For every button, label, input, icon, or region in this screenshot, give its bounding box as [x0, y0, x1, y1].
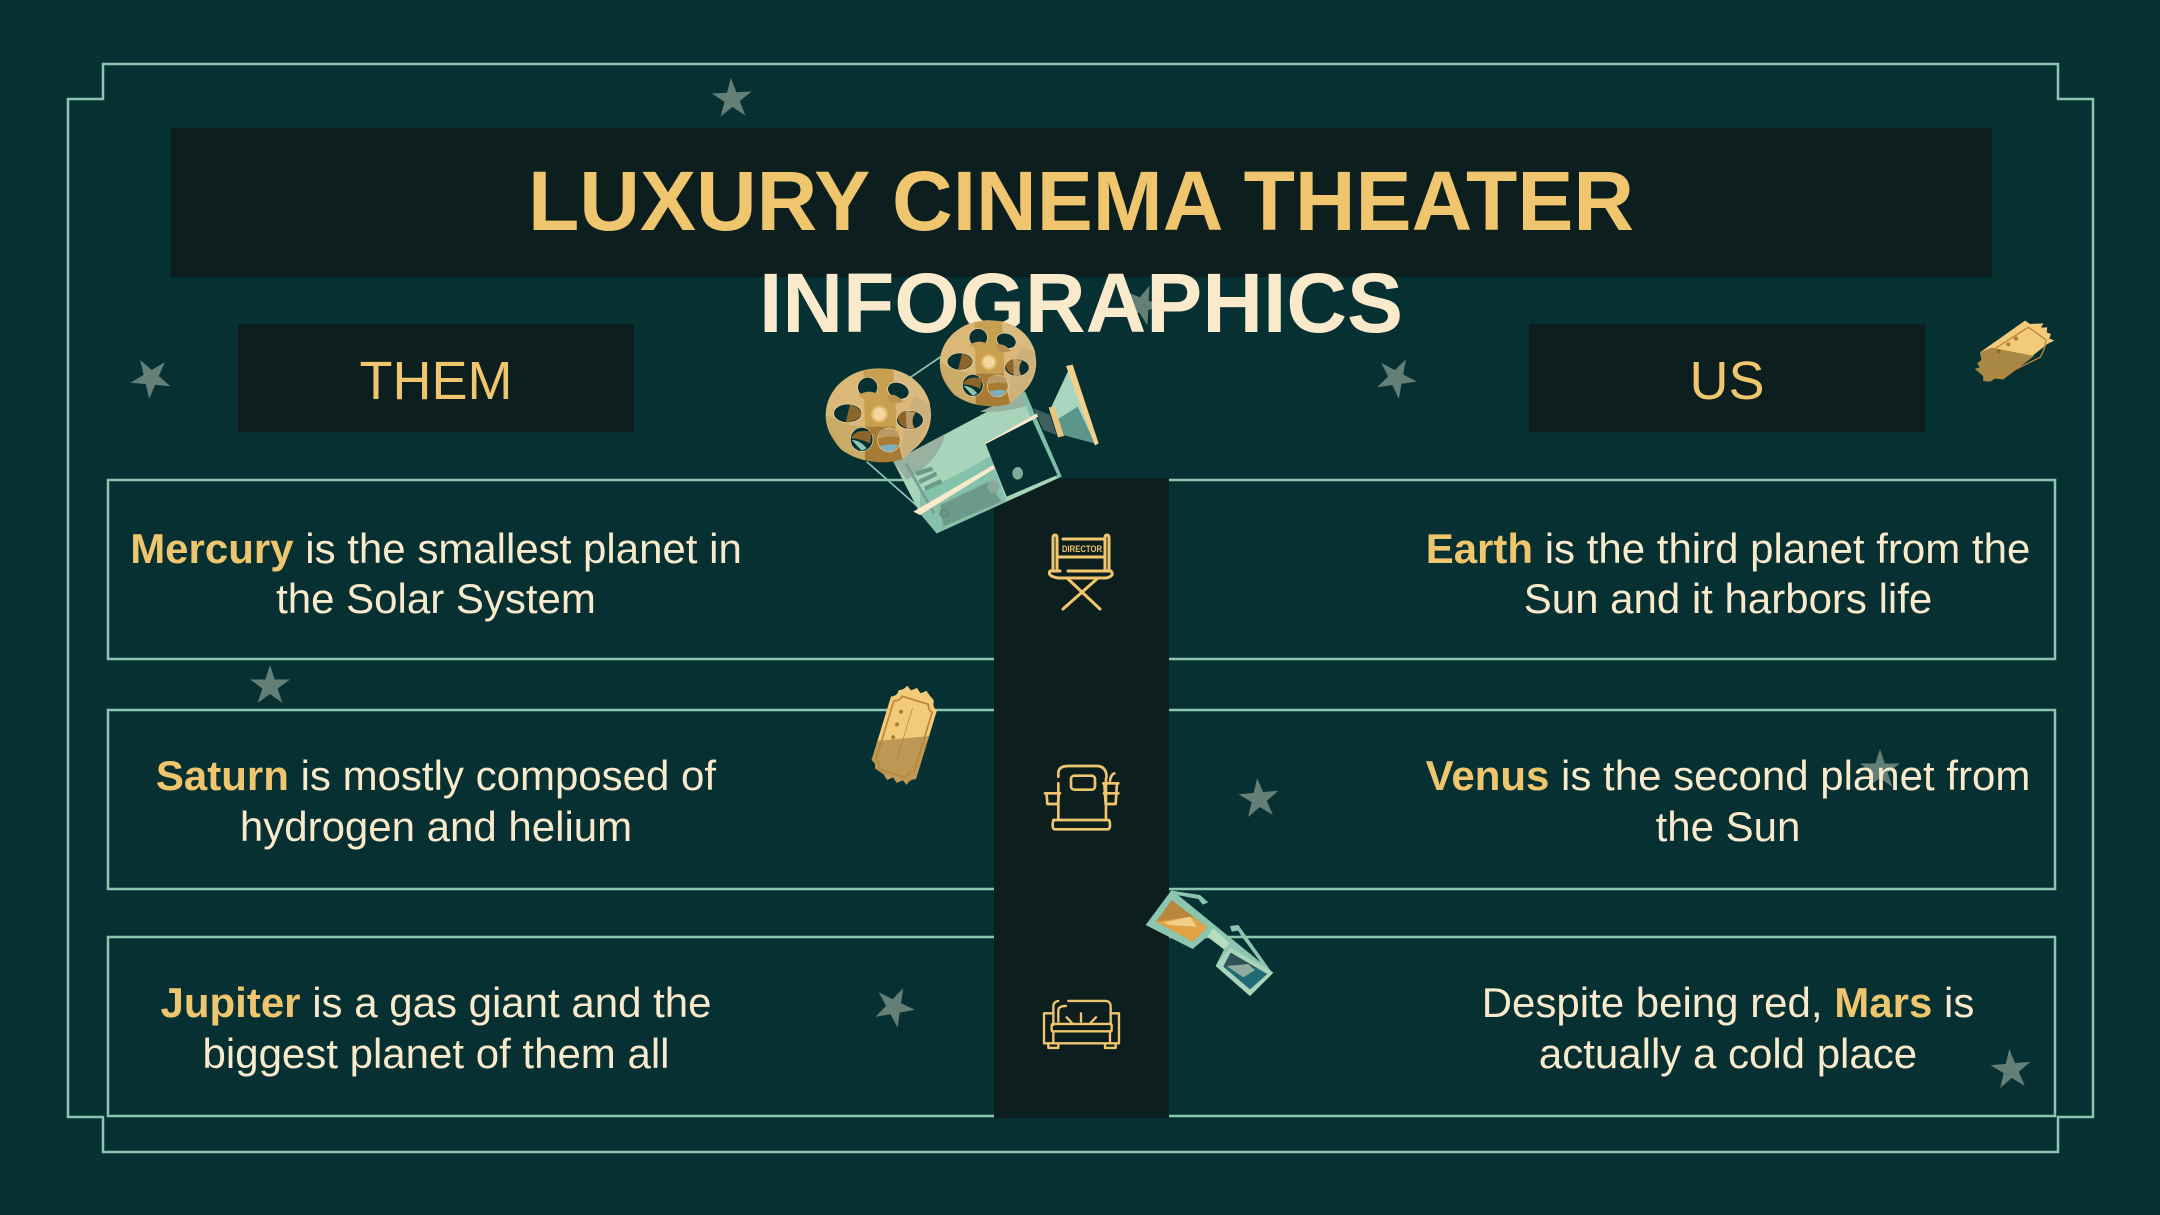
title: LUXURY CINEMA THEATER	[528, 154, 1634, 248]
icon: sofa	[1044, 1001, 1119, 1048]
text: Jupiter: Jupiter is a gas giant and the	[160, 979, 712, 1026]
center column	[994, 478, 1169, 1118]
icon: director chair: DIRECTOR	[1062, 544, 1102, 555]
title bar	[171, 128, 1992, 277]
icon: projector	[867, 355, 1099, 533]
text: Mars: actually a cold place	[1539, 1030, 1917, 1077]
title	[528, 154, 1634, 350]
text: Mercury: Mercury is the smallest planet in	[130, 525, 742, 572]
door	[986, 420, 1057, 497]
text: Mercury: the Solar System	[276, 575, 596, 622]
icon: 3D glasses	[1146, 890, 1273, 996]
text: Venus: Venus is the second planet from	[1426, 752, 2030, 799]
body	[893, 392, 1062, 533]
panel: rows outlines	[108, 480, 2055, 1116]
icon: film reel right	[940, 320, 1036, 406]
text: Jupiter: biggest planet of them all	[203, 1030, 669, 1077]
heading: them: THEM	[360, 351, 512, 411]
icon: director chair	[1049, 535, 1112, 609]
text: Earth: Sun and it harbors life	[1524, 575, 1932, 622]
heading: us	[1529, 324, 1925, 432]
horn	[1033, 365, 1099, 446]
text: Mars: Despite being red, Mars is	[1482, 979, 1974, 1026]
text: Saturn: hydrogen and helium	[240, 803, 632, 850]
title: INFOGRAPHICS	[759, 256, 1403, 350]
icon: ticket left	[867, 681, 942, 788]
stars	[129, 77, 2032, 1089]
text: Saturn: Saturn is mostly composed of	[156, 752, 716, 799]
heading: us: US	[1689, 351, 1765, 411]
belts	[867, 355, 943, 510]
icon: film reel left	[826, 368, 931, 462]
text: Earth: Earth is the third planet from the	[1426, 525, 2030, 572]
icon: cinema seat with drink	[1045, 766, 1118, 829]
heading: them	[238, 324, 634, 432]
icon: ticket right	[1975, 321, 2054, 382]
text: Venus: the Sun	[1656, 803, 1800, 850]
